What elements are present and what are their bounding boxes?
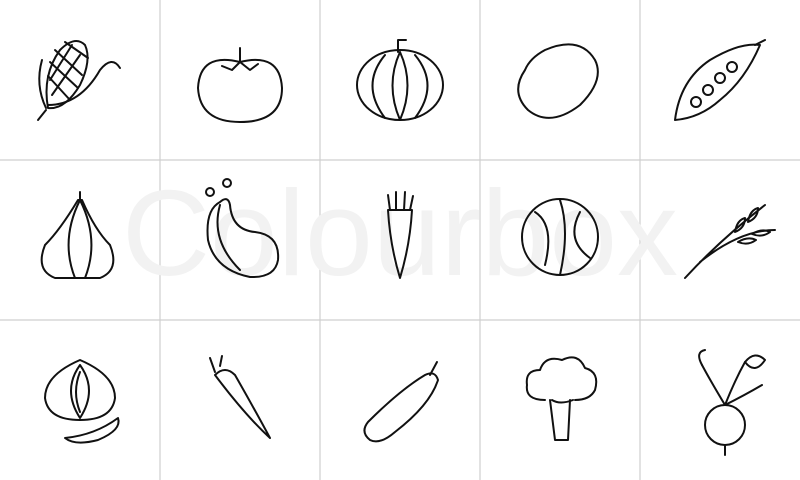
icon: cucumber (206, 179, 278, 277)
icon: carrot diagonal (210, 356, 270, 438)
icon: wheat (685, 205, 775, 278)
icon: garlic (42, 192, 113, 278)
icon: cabbage (522, 199, 598, 275)
icon: broccoli (527, 357, 596, 440)
icon: pumpkin (357, 40, 443, 120)
icon: peas (675, 40, 765, 120)
icon: tomato (198, 48, 282, 122)
watermark: Colourbox (122, 165, 678, 301)
icon: potato (518, 44, 598, 118)
icon: onion and pepper (45, 360, 119, 443)
icon: beet (699, 350, 765, 455)
icon: corn (38, 41, 120, 120)
icon: carrot upright (388, 192, 413, 278)
icon: zucchini (364, 362, 438, 441)
